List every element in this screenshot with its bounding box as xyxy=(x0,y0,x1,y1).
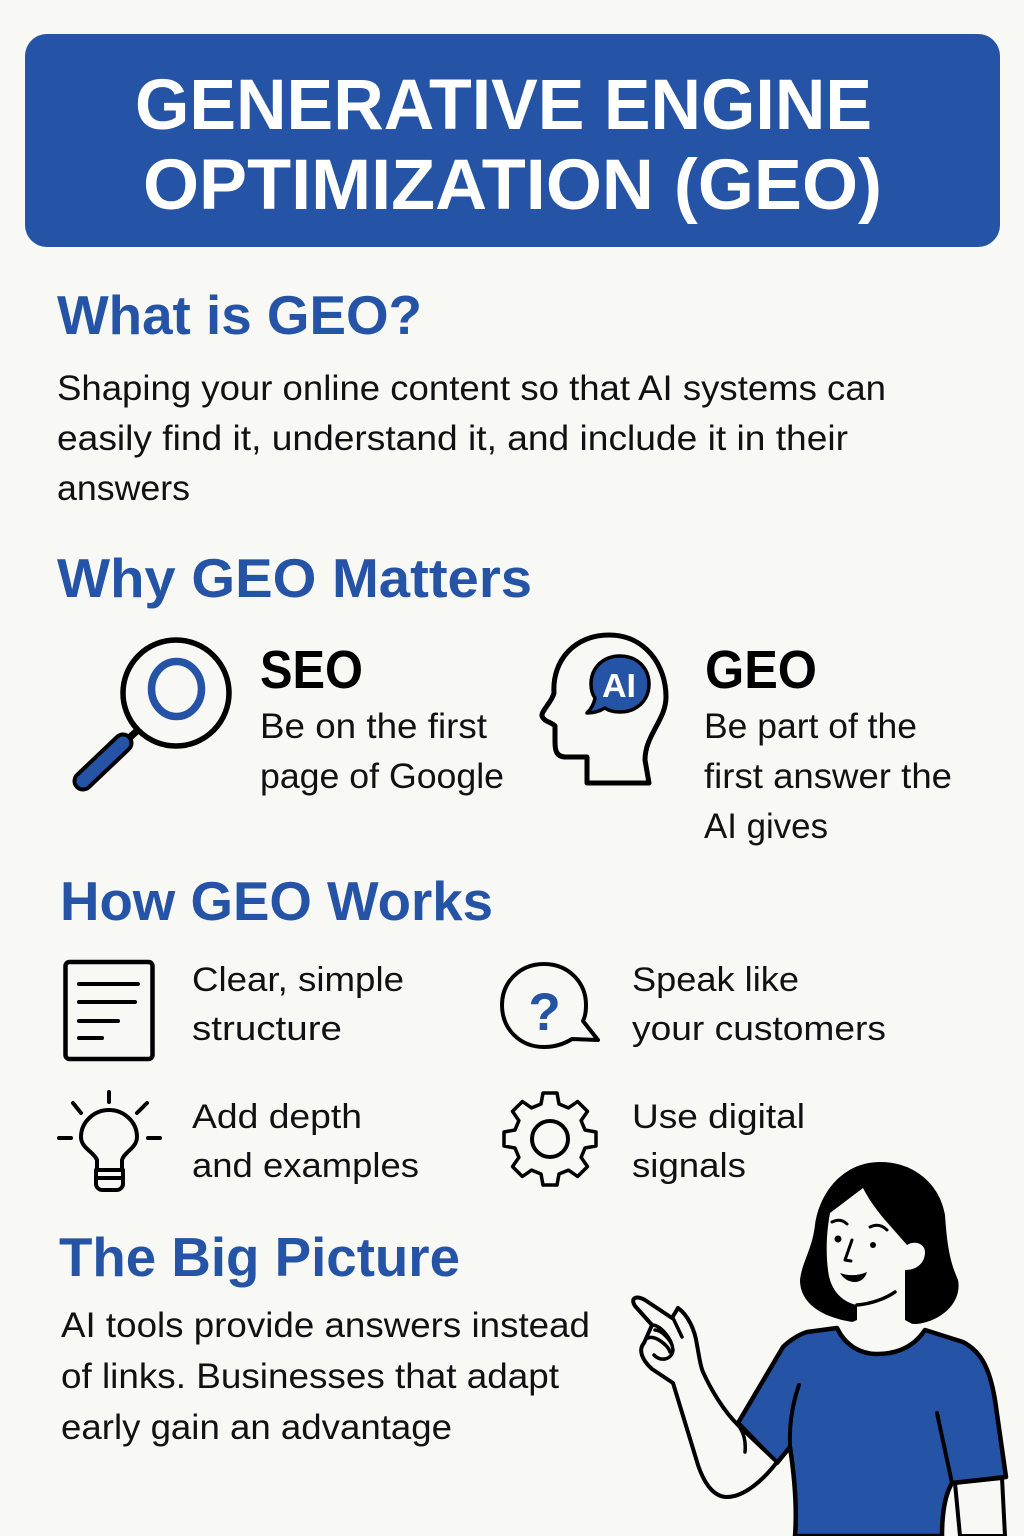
icon: head with AI bubble: AI xyxy=(602,667,636,704)
heading: why GEO matters: Why GEO Matters xyxy=(57,547,532,609)
right arm xyxy=(955,1478,1005,1536)
icon: document xyxy=(66,962,152,1059)
text block: big picture summary xyxy=(61,1306,590,1447)
text block: GEO definition: answers xyxy=(57,469,190,508)
icon: light bulb xyxy=(59,1092,160,1190)
icon: question bubble: ? xyxy=(528,983,561,1042)
hair xyxy=(800,1162,959,1324)
text: clear structure: structure xyxy=(192,1010,342,1048)
title banner: OPTIMIZATION (GEO) xyxy=(143,146,882,225)
text: digital signals: signals xyxy=(632,1147,746,1185)
text: digital signals: Use digital xyxy=(632,1098,805,1136)
SEO column: Be on the first xyxy=(260,707,487,746)
text: add depth xyxy=(192,1098,419,1185)
finger details xyxy=(648,1318,745,1452)
heading: what is GEO: What is GEO? xyxy=(57,284,422,346)
text block: big picture summary: AI tools provide answers instead xyxy=(61,1306,590,1345)
GEO column: AI gives xyxy=(704,807,828,846)
text block: big picture summary: of links. Businesses that adapt xyxy=(61,1357,559,1396)
heading: the big picture: The Big Picture xyxy=(59,1226,460,1288)
GEO column: GEO xyxy=(705,640,817,700)
face and neck xyxy=(827,1188,925,1354)
text: clear structure xyxy=(192,961,404,1048)
text block: GEO definition xyxy=(57,369,886,508)
GEO column: Be part of the xyxy=(704,707,917,746)
shirt fold lines xyxy=(790,1385,952,1483)
icon: head with AI bubble xyxy=(542,635,666,783)
icon: magnifying glass xyxy=(83,640,229,781)
icon: question bubble xyxy=(502,964,598,1047)
title banner: GENERATIVE ENGINE xyxy=(135,66,872,145)
SEO column xyxy=(260,640,504,796)
text block: big picture summary: early gain an advantage xyxy=(61,1408,452,1447)
GEO column xyxy=(704,640,952,846)
text: speak like customers: Speak like xyxy=(632,961,799,999)
blue shirt xyxy=(738,1328,1006,1536)
text: add depth: and examples xyxy=(192,1147,419,1185)
SEO column: SEO xyxy=(260,640,363,700)
icon: gear xyxy=(504,1093,596,1185)
text: add depth: Add depth xyxy=(192,1098,362,1136)
text block: GEO definition: easily find it, understand it, and include it in their xyxy=(57,419,848,458)
face details xyxy=(832,1220,895,1305)
text: speak like customers xyxy=(632,961,886,1048)
SEO column: page of Google xyxy=(260,757,504,796)
left arm and hand xyxy=(633,1298,777,1497)
text: speak like customers: your customers xyxy=(632,1010,886,1048)
heading: how GEO works: How GEO Works xyxy=(60,870,493,932)
illustration: woman pointing xyxy=(633,1162,1006,1536)
text: clear structure: Clear, simple xyxy=(192,961,404,999)
GEO column: first answer the xyxy=(704,757,952,796)
title banner xyxy=(25,34,1000,247)
text block: GEO definition: Shaping your online content so that AI systems can xyxy=(57,369,886,408)
text: digital signals xyxy=(632,1098,805,1185)
